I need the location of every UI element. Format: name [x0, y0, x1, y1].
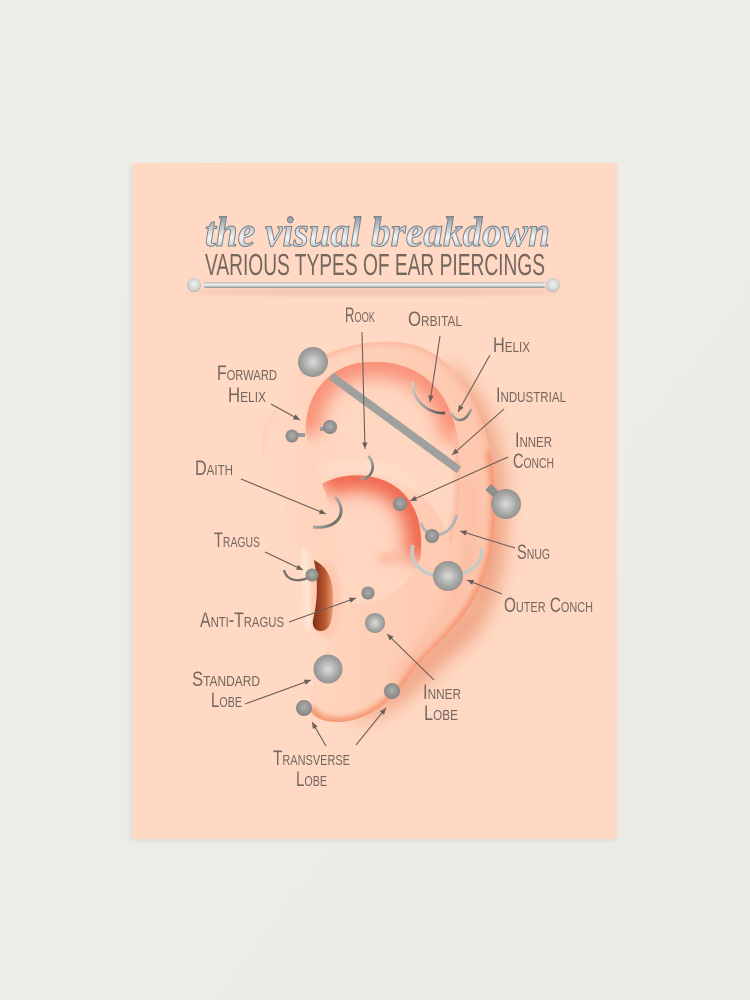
label: Industrial — [452, 384, 566, 455]
scapha pink shading — [306, 362, 460, 545]
piercing: transverse lobe studs — [296, 683, 400, 716]
piercing: orbital ring — [413, 382, 445, 413]
piercing: daith ring — [313, 497, 341, 527]
ear drop shadow — [350, 362, 507, 724]
label: Inner Conch: Conch — [513, 450, 554, 473]
label: Anti-Tragus: Anti-Tragus — [200, 609, 284, 632]
piercing: inner lobe stud — [365, 613, 385, 633]
scapha hollow — [306, 362, 460, 545]
label: Standard Lobe: Lobe — [211, 689, 242, 712]
label: Rook — [345, 304, 375, 449]
piercing: inner conch stud — [393, 497, 407, 511]
label: Daith: Daith — [195, 457, 233, 480]
conch bowl — [322, 475, 421, 604]
label: Snug: Snug — [517, 541, 550, 564]
piercing: rook ring — [361, 456, 373, 479]
ear canal — [313, 560, 333, 631]
label: Forward Helix — [217, 362, 300, 420]
label: Transverse Lobe — [273, 708, 386, 791]
piercing: standard lobe stud — [314, 654, 342, 684]
ear edge shading — [300, 342, 495, 722]
subtitle: VARIOUS TYPES OF EAR PIERCINGS — [205, 247, 545, 282]
piercing: snug ring — [421, 515, 457, 543]
piercing: outer conch ring — [412, 545, 482, 591]
label: Helix — [458, 334, 530, 412]
title script line: the visual breakdown — [205, 210, 550, 256]
conch red shading — [322, 475, 421, 560]
label: Forward Helix: Forward — [217, 362, 277, 385]
label: Inner Conch: Inner — [515, 429, 552, 452]
label: Inner Lobe — [387, 634, 461, 725]
label: Forward Helix: Helix — [228, 384, 266, 407]
label: Orbital: Orbital — [408, 308, 462, 331]
label: Standard Lobe: Standard — [192, 668, 260, 691]
label: Standard Lobe — [192, 668, 311, 712]
label: Tragus: Tragus — [214, 529, 260, 552]
ear body — [261, 342, 495, 722]
label: Outer Conch — [467, 580, 593, 617]
label: Inner Lobe: Lobe — [424, 702, 458, 725]
label: Inner Conch — [410, 429, 554, 501]
tragus highlight — [303, 548, 310, 628]
label: Daith — [195, 457, 326, 514]
piercing: industrial barbell — [298, 347, 521, 519]
label: Transverse Lobe: Lobe — [296, 768, 327, 791]
concha red spot — [377, 551, 405, 565]
label: Orbital — [408, 308, 462, 402]
piercing: helix ring — [451, 409, 471, 420]
label: Tragus — [214, 529, 303, 570]
label: Rook: Rook — [345, 304, 375, 327]
label: Anti-Tragus — [200, 598, 356, 632]
label: Inner Lobe: Inner — [423, 681, 461, 704]
piercing: tragus ring — [284, 568, 318, 582]
piercing: anti-tragus stud — [362, 586, 374, 600]
poster panel — [130, 163, 617, 841]
label: Transverse Lobe: Transverse — [273, 747, 350, 770]
ear illustration — [261, 342, 507, 724]
barbell divider — [187, 278, 560, 295]
piercing: forward helix studs — [286, 420, 337, 442]
antihelix highlight — [325, 466, 412, 488]
label: Outer Conch: Outer Conch — [504, 594, 593, 617]
label: Snug — [460, 531, 550, 564]
label: Helix: Helix — [493, 334, 530, 357]
canal halo — [311, 562, 341, 638]
label: Industrial: Industrial — [496, 384, 566, 407]
